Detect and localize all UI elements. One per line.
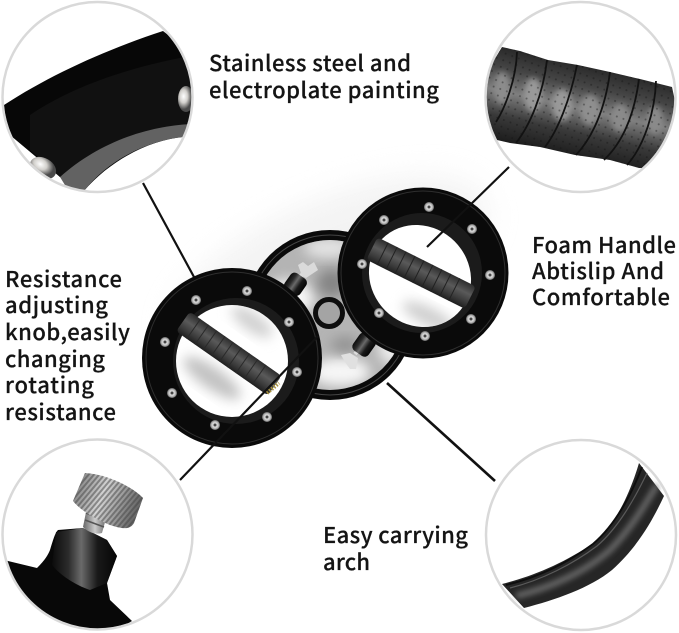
handle brand mark bbox=[267, 383, 279, 393]
top resistance knob bbox=[282, 262, 318, 298]
right grip ring bbox=[338, 188, 508, 358]
text: carrying arch: Easy carrying bbox=[323, 518, 468, 550]
text: foam handle: Abtislip And bbox=[532, 254, 664, 286]
bottom resistance knob bbox=[341, 331, 378, 369]
text: resistance knob: changing bbox=[5, 342, 105, 374]
product: wrist trainer bbox=[142, 188, 508, 448]
text: stainless steel: Stainless steel and bbox=[209, 46, 411, 78]
leader line: resistance knob bbox=[180, 336, 318, 480]
right foam handle bbox=[366, 237, 476, 309]
text: resistance knob: Resistance bbox=[5, 262, 122, 294]
left foam handle bbox=[176, 312, 282, 396]
text: foam handle: Comfortable bbox=[532, 280, 670, 312]
center carry ring bbox=[316, 300, 342, 326]
text: resistance knob: resistance bbox=[5, 395, 116, 427]
text: stainless steel: electroplate painting bbox=[209, 73, 439, 105]
detail circle: resistance knob bbox=[0, 440, 192, 633]
right ring screws bbox=[357, 202, 495, 341]
leader line: foam handle bbox=[427, 167, 509, 247]
text: carrying arch bbox=[323, 518, 468, 577]
middle disc with arch bbox=[257, 230, 404, 400]
text: stainless steel bbox=[209, 46, 439, 105]
left ring screws bbox=[160, 286, 302, 430]
text: carrying arch: arch bbox=[323, 545, 370, 577]
text: resistance knob: knob,easily bbox=[5, 315, 130, 347]
text: resistance knob: rotating bbox=[5, 368, 94, 400]
soft floor shadow bbox=[146, 137, 514, 403]
detail circle: foam handle bbox=[470, 2, 679, 192]
detail circle: stainless steel bbox=[2, 2, 200, 192]
text: foam handle bbox=[532, 228, 676, 312]
text: resistance knob bbox=[5, 262, 130, 427]
text: resistance knob: adjusting bbox=[5, 288, 108, 320]
leader line: steel detail bbox=[143, 183, 194, 277]
text: foam handle: Foam Handle bbox=[532, 228, 676, 260]
detail circle: carrying arch bbox=[486, 440, 676, 630]
leader line: carrying arch bbox=[387, 383, 495, 481]
left grip ring bbox=[142, 268, 322, 448]
